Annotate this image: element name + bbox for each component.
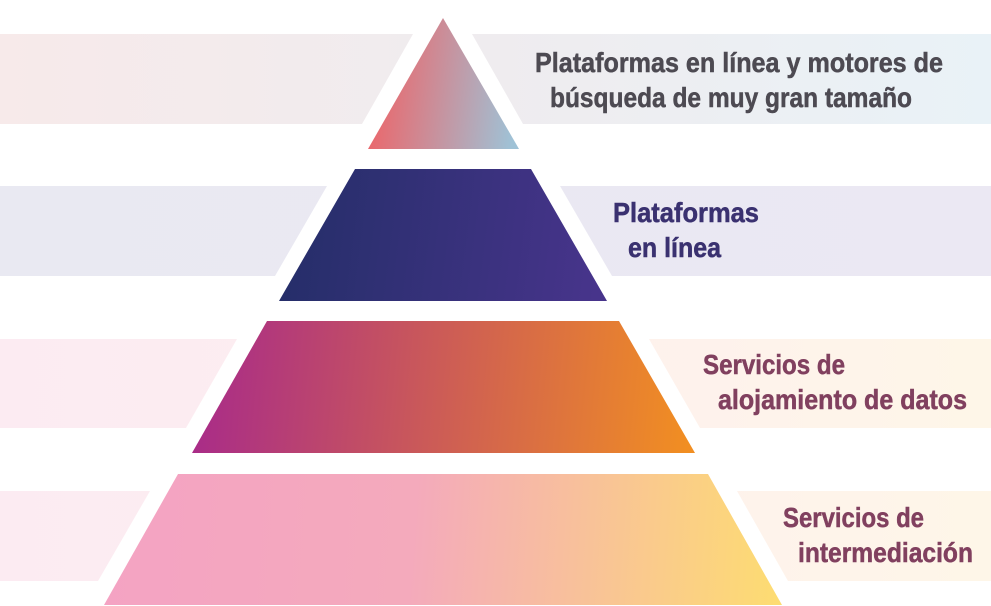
label: hosting services: Servicios de: [703, 349, 845, 380]
tier 3 band: hosting services: [0, 339, 991, 428]
label: online platforms: Plataformas: [613, 197, 759, 228]
label: very large online platforms and search engines: [535, 47, 943, 113]
label: very large online platforms and search engines: Plataformas en línea y motores de: [535, 47, 943, 78]
pyramid tier 1: triangle: [368, 18, 519, 149]
label: online platforms: [613, 197, 759, 263]
tier 4 band: intermediary services: [0, 491, 991, 581]
label: online platforms: en línea: [628, 232, 721, 263]
label: hosting services: alojamiento de datos: [718, 384, 967, 415]
label: intermediary services: Servicios de: [783, 502, 924, 533]
tier 1 band: very large platforms: [0, 34, 991, 124]
tier 2 band: online platforms: [0, 186, 991, 276]
pyramid tier 2: [279, 169, 607, 301]
pyramid tier 3: [192, 321, 695, 453]
label: very large online platforms and search engines: búsqueda de muy gran tamaño: [550, 82, 912, 113]
label: hosting services: [703, 349, 967, 415]
pyramid tier 4: [104, 474, 782, 605]
label: intermediary services: [783, 502, 973, 568]
